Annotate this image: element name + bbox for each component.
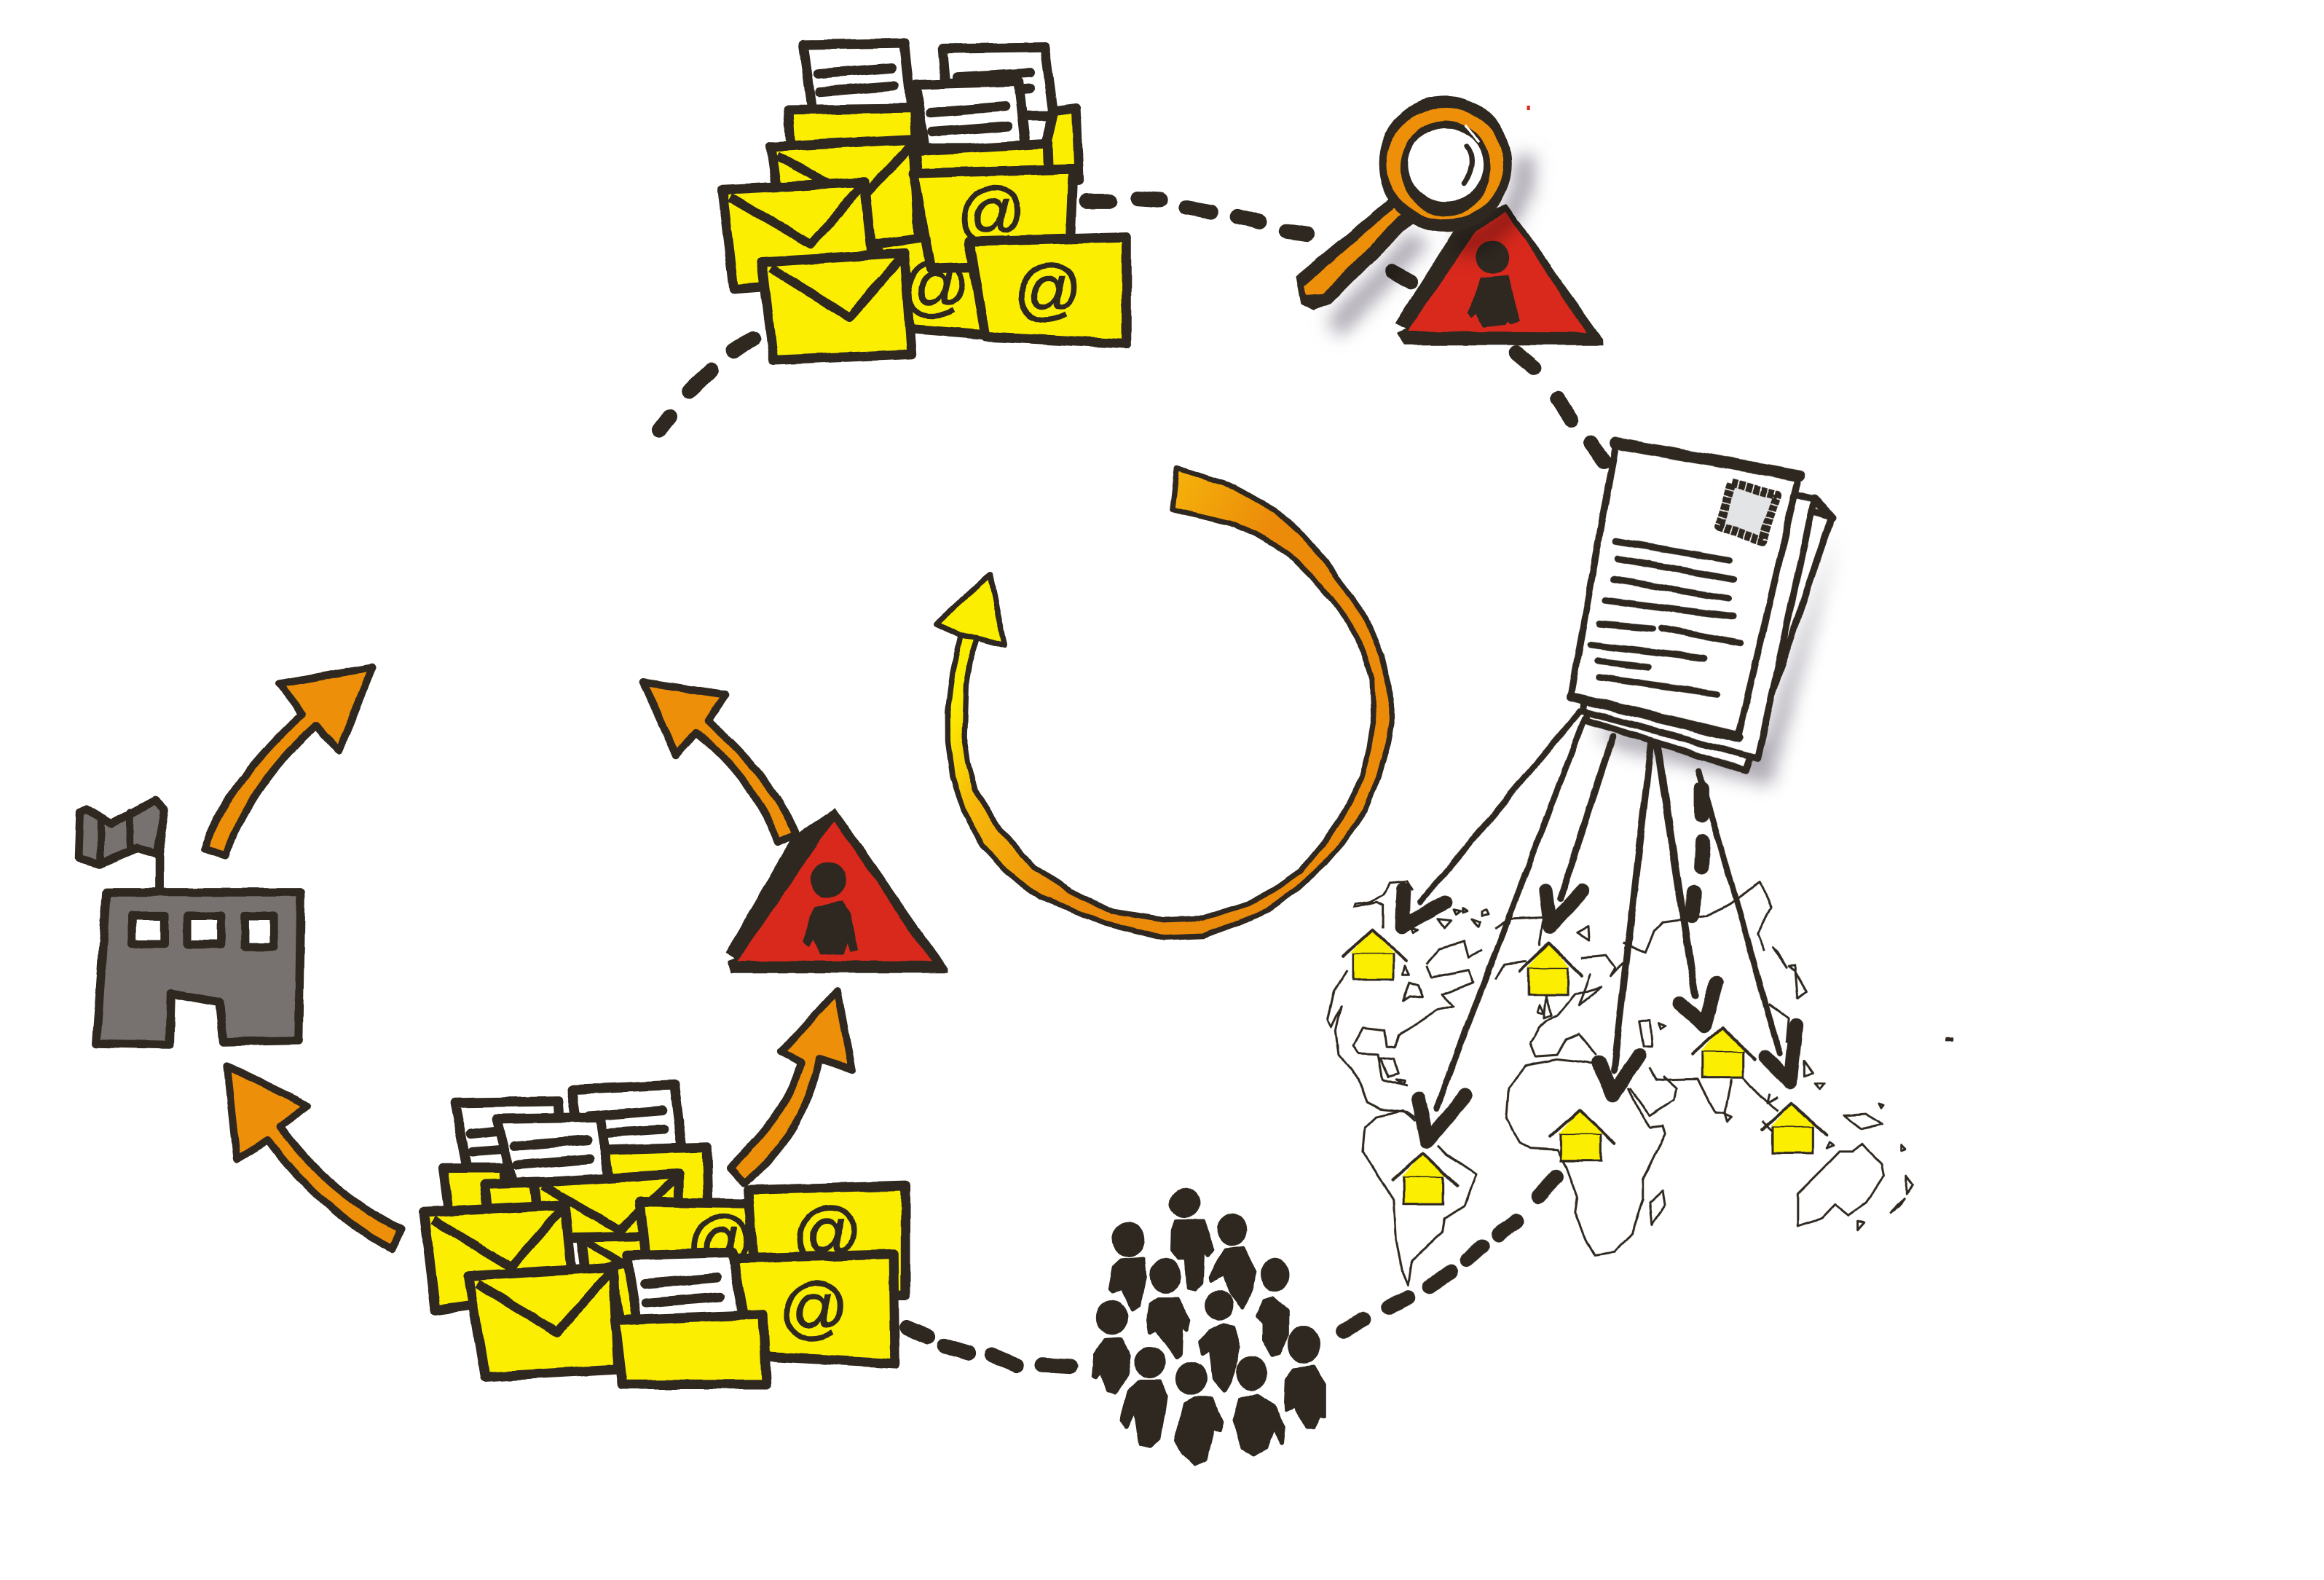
central circular arrow	[937, 468, 1392, 938]
text lines	[1591, 541, 1740, 693]
orange arrow: envelopes to triangle	[730, 990, 852, 1184]
person	[1111, 1222, 1144, 1309]
dashed path: envelopes to magnifier	[1087, 199, 1307, 234]
house: South America	[1393, 1153, 1457, 1203]
small ink speck	[1946, 1037, 1953, 1041]
windows	[132, 916, 274, 947]
at sign: @	[901, 246, 970, 323]
arrow 5	[1657, 744, 1717, 1026]
house: India	[1693, 1027, 1755, 1077]
stamp	[1720, 483, 1777, 541]
dashed path: people to map	[1343, 1177, 1556, 1331]
person	[1211, 1213, 1254, 1308]
person	[803, 863, 856, 954]
flag	[79, 801, 165, 889]
person	[1258, 1257, 1289, 1355]
building body	[96, 892, 301, 1045]
dashed path: left of top envelopes	[660, 338, 753, 430]
house: Africa	[1551, 1110, 1614, 1160]
person	[1170, 1188, 1212, 1289]
orange arrow: triangle upward	[643, 683, 796, 843]
americas	[1328, 881, 1482, 1285]
arrow 1	[1402, 712, 1580, 927]
person	[1286, 1326, 1323, 1427]
house: South East Asia	[1762, 1103, 1826, 1153]
person	[1200, 1290, 1239, 1391]
world map	[1328, 881, 1913, 1285]
letter stack	[1571, 443, 1837, 785]
person	[1149, 1258, 1189, 1358]
dashed path: envelopes to people	[907, 1328, 1070, 1367]
at sign: @	[792, 1193, 862, 1270]
crowd of people	[1094, 1188, 1323, 1464]
eurasia	[1495, 882, 1806, 1116]
at sign: @	[779, 1269, 848, 1345]
at sign: @	[957, 174, 1026, 251]
dashes near map	[1693, 788, 1703, 916]
person	[1175, 1362, 1221, 1464]
distribution arrows from letters to houses	[1402, 712, 1797, 1141]
orange arrow: envelopes to building	[227, 1066, 402, 1249]
arrow 3	[1546, 736, 1612, 927]
person	[1235, 1356, 1283, 1455]
australia and islands	[1725, 1061, 1913, 1230]
building with flag	[79, 801, 301, 1045]
arrow 4	[1599, 744, 1651, 1096]
house: North America	[1343, 929, 1406, 980]
person	[1094, 1300, 1130, 1393]
person	[1122, 1347, 1166, 1446]
at sign: @	[686, 1203, 755, 1279]
bottom envelope cluster	[424, 1085, 905, 1384]
arrow 6	[1698, 771, 1797, 1082]
arrow 2	[1419, 719, 1584, 1141]
house: Europe	[1519, 943, 1581, 994]
warning triangle with person, lower	[727, 809, 947, 972]
africa	[1506, 1059, 1666, 1256]
greenland and arctic islands	[1381, 908, 1489, 1084]
orange arrow: building upward	[204, 667, 373, 855]
warning triangle with person, top	[1396, 205, 1602, 345]
red speck	[1527, 105, 1529, 110]
magnifying glass	[1296, 95, 1524, 329]
top envelope cluster	[722, 43, 1127, 360]
dashed path: behind warning triangle	[1392, 271, 1604, 461]
person	[1469, 242, 1519, 326]
arrowhead	[937, 575, 1004, 645]
at sign: @	[1013, 251, 1082, 327]
